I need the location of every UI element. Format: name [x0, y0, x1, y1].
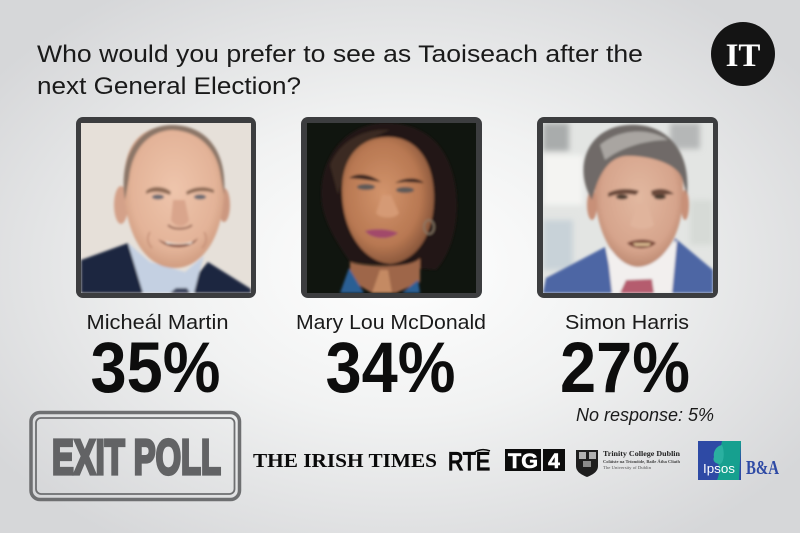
logo: Trinity College Dublin — [576, 450, 680, 477]
logo: Trinity College Dublin: Coláiste na Tríonóide, Baile Átha Cliath — [603, 459, 680, 464]
logo: Trinity College Dublin: The University of Dublin — [603, 465, 652, 470]
panel: photo of Mary Lou McDonald — [301, 117, 482, 298]
logo: B&A: B&A — [746, 457, 779, 479]
title: Who would you prefer to see as Taoiseach after the — [37, 41, 643, 68]
logo: TG4 — [505, 449, 565, 473]
logo: Ipsos: Ipsos — [703, 462, 735, 476]
icon: Irish Times IT logo — [711, 22, 775, 86]
stamp: exit poll — [31, 412, 240, 500]
panel: photo of Micheál Martin — [76, 117, 256, 298]
candidate: Micheál Martin result: Micheál Martin — [86, 311, 228, 334]
candidate: Simon Harris result: 27% — [560, 329, 690, 408]
logo: The Irish Times: THE IRISH TIMES — [253, 450, 437, 472]
stamp: exit poll: EXIT POLL — [52, 431, 221, 485]
candidate: Mary Lou McDonald result: Mary Lou McDonald — [296, 311, 486, 334]
logo: RTE: RTE — [448, 448, 490, 476]
icon: Irish Times IT logo: IT — [726, 38, 760, 74]
logo: TG4: TG — [508, 450, 538, 473]
logo: Ipsos — [698, 441, 741, 480]
title: next General Election? — [37, 73, 301, 100]
candidate: Micheál Martin result: 35% — [90, 329, 220, 408]
logo: TG4: 4 — [548, 450, 560, 473]
note: no response: No response: 5% — [576, 405, 714, 425]
panel: photo of Simon Harris — [537, 117, 718, 298]
logo: Trinity College Dublin: Trinity College Dublin — [603, 450, 680, 458]
title — [37, 41, 643, 100]
candidate: Mary Lou McDonald result: 34% — [326, 329, 456, 408]
candidate: Mary Lou McDonald result — [296, 311, 486, 408]
candidate: Simon Harris result: Simon Harris — [565, 311, 689, 334]
